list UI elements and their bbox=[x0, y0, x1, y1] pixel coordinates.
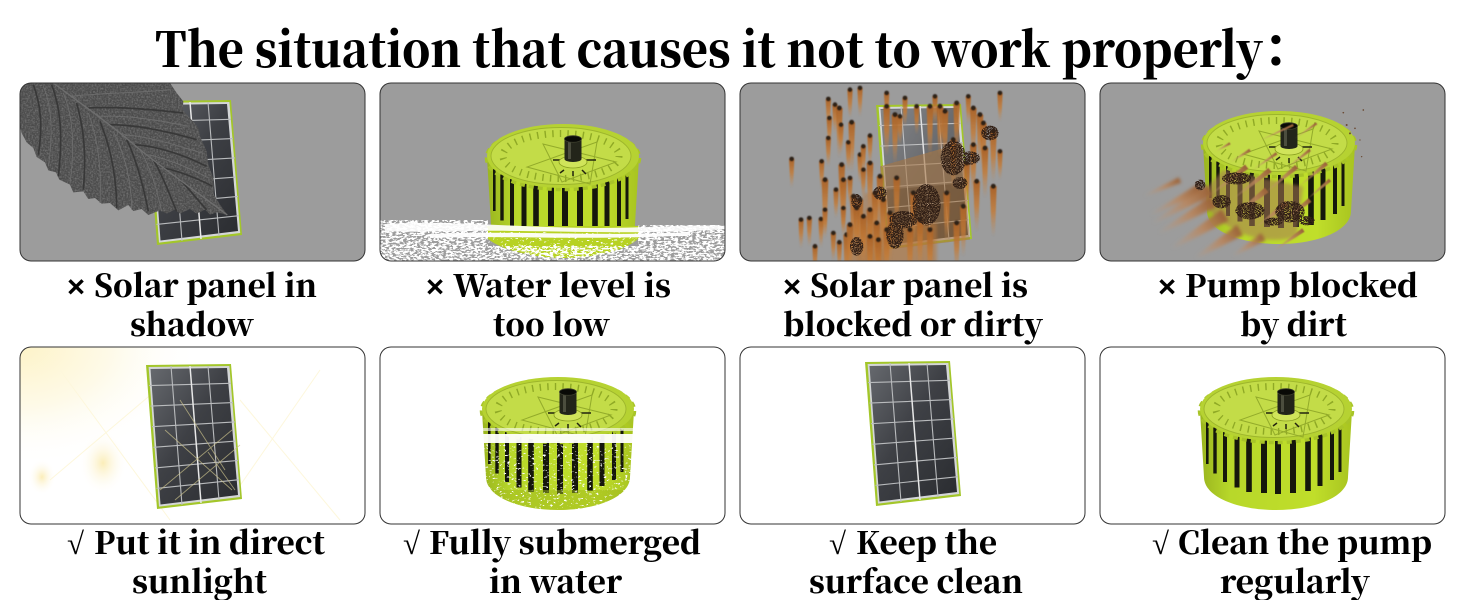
water bubbles over pump bbox=[480, 428, 637, 512]
icon: clean solar panel bbox=[865, 361, 961, 506]
icon: pump above water bbox=[487, 124, 639, 257]
sunlight glow bbox=[20, 347, 340, 520]
dirt on pump bbox=[1142, 109, 1364, 263]
label: direct sunlight bbox=[67, 518, 325, 600]
label: clean surface: √ bbox=[829, 526, 846, 561]
label: direct sunlight: Put it in direct bbox=[94, 518, 325, 563]
panel: solar panel in shadow bbox=[20, 83, 365, 261]
label: solar panel blocked or dirty: Solar panel is bbox=[810, 261, 1028, 306]
label: pump blocked by dirt bbox=[1158, 261, 1418, 345]
dirt on solar panel bbox=[788, 85, 1004, 260]
title: ： bbox=[1252, 12, 1300, 81]
icon: shaded solar panel bbox=[146, 100, 242, 245]
label: clean pump: √ bbox=[1152, 526, 1169, 561]
label: fully submerged: Fully submerged bbox=[429, 518, 701, 563]
panel: clean surface bbox=[740, 347, 1085, 524]
label: solar panel in shadow: Solar panel in bbox=[94, 261, 317, 306]
label: pump blocked by dirt: by dirt bbox=[1240, 300, 1347, 345]
label: solar panel blocked or dirty: blocked or dirty bbox=[783, 300, 1043, 345]
label: clean surface bbox=[809, 518, 1023, 600]
panel: direct sunlight bbox=[20, 347, 365, 524]
panel: clean pump bbox=[1100, 347, 1445, 524]
label: water level too low: Water level is bbox=[453, 261, 671, 306]
label: solar panel blocked or dirty: × bbox=[783, 269, 801, 304]
panel: fully submerged bbox=[380, 347, 725, 524]
light flare on panel bbox=[160, 400, 240, 500]
label: pump blocked by dirt: Pump blocked bbox=[1185, 261, 1418, 306]
icon: submerged pump bbox=[482, 377, 634, 510]
label: water level too low: too low bbox=[493, 300, 610, 345]
label: water level too low bbox=[426, 261, 671, 345]
label: solar panel in shadow: × bbox=[67, 269, 85, 304]
label: clean pump: Clean the pump bbox=[1178, 518, 1432, 563]
icon: dirty pump bbox=[1203, 111, 1355, 244]
panel: water level too low bbox=[380, 83, 725, 261]
label: clean surface: Keep the bbox=[856, 518, 997, 563]
label: solar panel blocked or dirty bbox=[783, 261, 1043, 345]
panel: solar panel blocked or dirty bbox=[740, 83, 1085, 290]
icon: clean pump bbox=[1200, 377, 1352, 510]
label: solar panel in shadow bbox=[67, 261, 317, 345]
icon: leaf casting shadow bbox=[20, 83, 227, 215]
title: The situation that causes it not to work properly bbox=[155, 12, 1263, 81]
icon: dirty solar panel bbox=[876, 104, 972, 249]
label: fully submerged: √ bbox=[403, 526, 420, 561]
panel: pump blocked by dirt bbox=[1100, 83, 1445, 263]
label: clean pump bbox=[1152, 518, 1432, 600]
icon: sunlit solar panel bbox=[146, 364, 242, 509]
label: direct sunlight: √ bbox=[67, 526, 84, 561]
label: fully submerged bbox=[403, 518, 701, 600]
label: pump blocked by dirt: × bbox=[1158, 269, 1176, 304]
label: water level too low: × bbox=[426, 269, 444, 304]
water surface bbox=[380, 220, 725, 261]
label: solar panel in shadow: shadow bbox=[130, 300, 254, 345]
